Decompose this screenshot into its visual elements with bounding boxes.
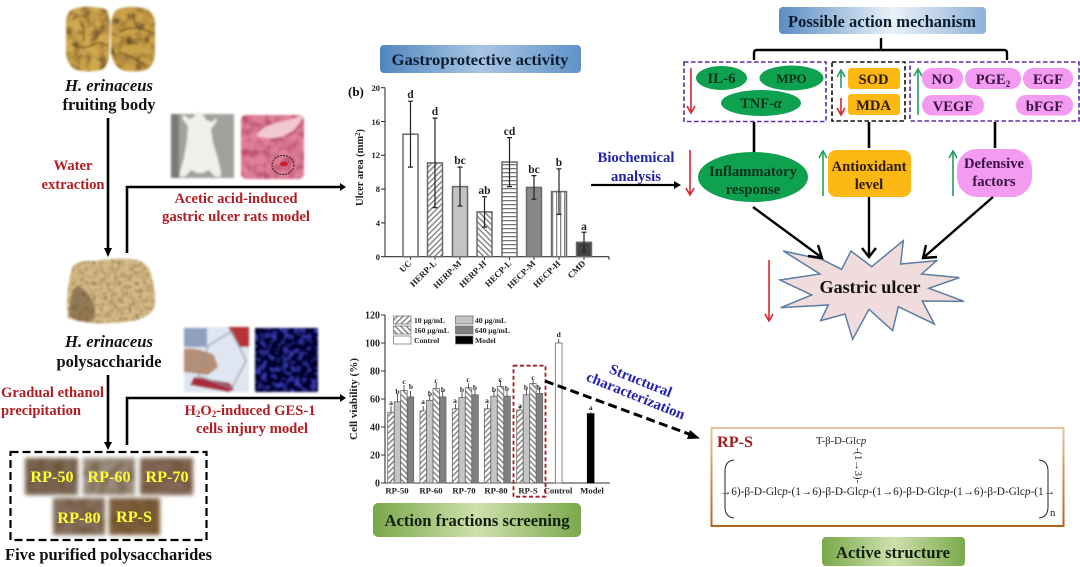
category labels: CMD [565,258,587,280]
marker: EGF: EGF [1033,72,1063,88]
legend [394,316,510,345]
significance letters: ab [478,185,491,197]
photo: cell flask [184,327,249,392]
heading: active structure [822,537,965,566]
tick labels: 16 [372,117,380,127]
legend: Model [475,336,496,345]
arrow: increase [914,69,922,115]
axis label: Ulcer area (mm [354,134,366,206]
tick labels: 120 [365,310,380,322]
significance letters: a [421,397,425,406]
label: H2O2 cell injury model [184,403,316,437]
marker: EGF [1023,68,1073,89]
significance letters: c [498,375,502,384]
label: H. erinaceus fruiting body: fruiting body [62,95,156,114]
label: RP-S: RP-S [717,433,753,451]
node: antioxidant level [828,150,911,197]
marker: bFGF: bFGF [1026,99,1063,115]
node: gastric ulcer [780,241,964,339]
marker: IL-6 [696,66,747,90]
brackets [725,460,1048,518]
photo: stomach tissue [241,115,304,179]
significance letters: a [518,401,522,410]
category labels: RP-80 [484,486,508,496]
significance letters: cd [504,126,516,138]
heading: active structure: Active structure [836,543,950,562]
arrow: to ulcer rats model [127,183,346,253]
tick labels [372,83,381,262]
heading: possible action mechanism [779,7,986,34]
category labels: HERP-L [408,258,439,289]
arrow: increase [837,70,845,88]
marker: PGE2: 2 [1006,79,1011,89]
tick labels: 12 [372,150,380,160]
significance letters: c [434,376,438,385]
significance letters: c [402,377,406,386]
tick labels: 8 [376,184,380,194]
category labels: HECP-H [531,258,563,290]
node: gastric ulcer: Gastric ulcer [820,277,921,297]
category labels: RP-S [518,486,538,496]
category labels: HERP-H [457,258,489,290]
tile: RP-S: RP-S [116,508,152,526]
branch residue: T-β-D-Glcp [816,435,867,447]
category labels: RP-70 [452,486,476,496]
label: water extraction [42,158,104,193]
legend: 160 μg/mL [414,326,449,335]
node: inflammatory response [698,152,808,202]
label: H. erinaceus fruiting body: H. erinaceus [64,76,153,95]
heading: gastroprotective activity: Gastroprotective activity [392,50,568,69]
panel: inflammatory markers [684,62,826,122]
tile: RP-60 [83,458,135,495]
heading: five purified polysaccharides: Five purified polysaccharides [5,545,213,564]
arrow: decrease [687,68,695,113]
panel tag: (b) [348,84,364,99]
arrow: structural characterization [545,362,700,439]
node: antioxidant level: Antioxidant [832,159,907,175]
category labels: HECP-L [483,258,514,289]
significance letters: b [537,383,541,392]
marker: IL-6: IL-6 [707,71,736,87]
significance letters [407,89,587,233]
panel: five purified polysaccharides [10,452,206,540]
label: acetic acid model [162,191,310,225]
label: gradual ethanol precipitation: precipitation [1,403,81,419]
label: acetic acid model: gastric ulcer rats model [162,209,310,225]
significance letters: b [409,382,413,391]
connectors: marker panels to outcomes [754,122,995,152]
marker: VEGF [922,95,984,116]
marker: PGE2: PGE [976,72,1006,88]
tick labels [365,310,380,490]
label: gradual ethanol precipitation: Gradual ethanol [1,385,104,401]
arrow: fruiting body to polysaccharide [104,118,112,257]
significance letters: a [581,221,587,233]
chart: cell viability bar chart [348,310,610,497]
arrow: structural characterization: Structural [607,362,674,401]
tile: RP-70: RP-70 [145,468,189,486]
significance letters: c [531,373,535,382]
photo: polysaccharide powder [67,259,155,323]
marker: TNF-alpha: TNF-α [740,96,783,112]
label: acetic acid model: Acetic acid-induced [174,191,298,207]
significance letters: b [492,385,496,394]
category labels [385,486,604,496]
tile: RP-80: RP-80 [57,509,101,527]
legend: Control [414,336,439,345]
significance letters: bc [454,155,466,167]
marker: NO [922,68,963,89]
significance letters: b [428,389,432,398]
arrow: to GES-1 cells model [127,394,346,445]
node: antioxidant level: level [855,177,883,193]
axis label: ) [354,129,366,133]
label: H2O2 cell injury model: O [200,403,212,419]
error bars [408,101,586,252]
significance letters: b [395,387,400,396]
tick labels: 20 [370,450,380,462]
tick labels: 0 [375,478,380,490]
axis label: Cell viability (%) [348,358,360,440]
photo: fruiting body [66,7,155,71]
significance letters: b [441,385,445,394]
category labels: HECP-M [505,258,538,291]
arrows: outcomes to gastric ulcer [753,197,993,258]
panel: defensive markers [910,62,1079,121]
label: H2O2 cell injury model: -induced GES-1 [216,403,316,419]
heading: action fractions screening: Action fractions screening [384,511,570,530]
significance letters: c [466,375,470,384]
heading: action fractions screening [373,503,581,537]
tick labels: 80 [370,366,380,378]
tick labels: 0 [376,252,380,262]
label: water extraction: Water [54,158,93,174]
legend: 40 μg/mL [475,316,506,325]
node: defensive factors: Defensive [964,156,1024,172]
panel: RP-S structure [712,428,1064,526]
marker: SOD: SOD [858,72,889,88]
label: H. erinaceus polysaccharide [56,332,162,371]
arrow: biochemical analysis [591,150,681,189]
heading: gastroprotective activity [380,45,581,73]
node: defensive factors: factors [972,174,1016,190]
bracket: mechanism branches [754,38,1007,60]
bars [403,134,592,257]
label: H. erinaceus polysaccharide: polysaccharide [56,352,162,371]
label: H. erinaceus polysaccharide: H. erinaceus [64,332,153,351]
repeat index: n [1050,507,1056,519]
arrow: polysaccharide to purified fractions [104,375,112,450]
category labels: UC [397,258,413,274]
marker: PGE2 [965,68,1021,89]
label: H2O2 cell injury model: 2 [196,409,201,419]
significance letters: b [505,384,509,393]
node: defensive factors [957,149,1032,197]
marker: TNF-alpha [721,90,801,116]
significance letters: d [407,89,414,101]
label: H. erinaceus fruiting body [62,76,156,114]
category labels [397,258,587,291]
heading: possible action mechanism: Possible action mechanism [788,12,976,31]
category labels: Model [580,486,604,496]
label: H2O2 cell injury model: H [184,403,196,419]
arrow: gastric ulcer decrease [765,260,773,321]
arrow: decrease [837,98,845,115]
marker: MPO [760,66,824,90]
icon: ulcer circle [272,156,294,174]
label: H2O2 cell injury model: cells injury model [196,421,308,437]
tick labels: 20 [372,83,380,93]
marker: MPO: MPO [776,71,807,86]
significance letters: a [453,396,457,405]
tile: RP-60: RP-60 [87,468,131,486]
tile: RP-S [109,498,160,535]
axes [381,315,610,483]
tile: RP-70 [140,458,193,495]
significance letters: bc [528,164,540,176]
tick labels: 60 [370,394,380,406]
significance letters: d [557,330,562,339]
tile: RP-50: RP-50 [30,468,74,486]
significance letters: d [432,106,439,118]
significance letters: b [556,157,562,169]
node: inflammatory response: Inflammatory [709,164,798,180]
tick labels: 4 [376,218,381,228]
tick labels: 40 [370,422,380,434]
category labels: Control [544,486,573,496]
arrow: antioxidant increase [819,151,827,196]
arrow: inflammatory decrease [686,150,694,195]
significance letters: b [473,383,477,392]
arrow: defensive increase [949,151,957,196]
marker: bFGF [1016,95,1073,116]
significance letters [389,330,593,412]
node: inflammatory response: response [726,182,781,198]
marker: MDA: MDA [856,98,891,114]
error bars [391,339,591,414]
marker: VEGF: VEGF [933,99,973,115]
tick labels: 100 [365,338,380,350]
category labels: RP-50 [385,486,409,496]
significance letters: a [485,396,489,405]
photo: rat model [171,111,234,178]
significance letters: a [389,398,393,407]
tile: RP-80 [53,498,105,535]
significance letters: a [589,403,593,412]
legend: 640 μg/mL [475,326,510,335]
axis label: 2 [354,132,362,136]
bars [388,343,594,483]
label: H2O2 cell injury model: 2 [212,409,217,419]
panel: antioxidant markers [832,62,905,121]
arrow: biochemical analysis: Biochemical [598,150,674,166]
label: gradual ethanol precipitation [1,385,104,419]
main chain: →6)-β-D-Glcp-(1→6)-β-D-Glcp-(1→6)-β-D-Glcp-(1→6)-β-D-Glcp-(1→ [720,486,1055,498]
category labels: HERP-M [431,258,464,291]
significance letters: b [524,383,528,392]
marker: NO: NO [932,72,953,88]
category labels: RP-60 [419,486,443,496]
branch linkage: -(1→3)- [852,448,864,483]
legend: 10 μg/mL [414,316,445,325]
tile: RP-50 [25,458,78,495]
chart: ulcer area bar chart [348,83,609,291]
arrow: structural characterization: characterization [584,369,687,423]
arrow: biochemical analysis: analysis [611,169,661,185]
RP-S highlight box [514,366,546,497]
photo: fluorescent cells [255,328,318,392]
significance letters: b [460,385,464,394]
label: water extraction: extraction [42,177,104,193]
axes [381,88,609,260]
